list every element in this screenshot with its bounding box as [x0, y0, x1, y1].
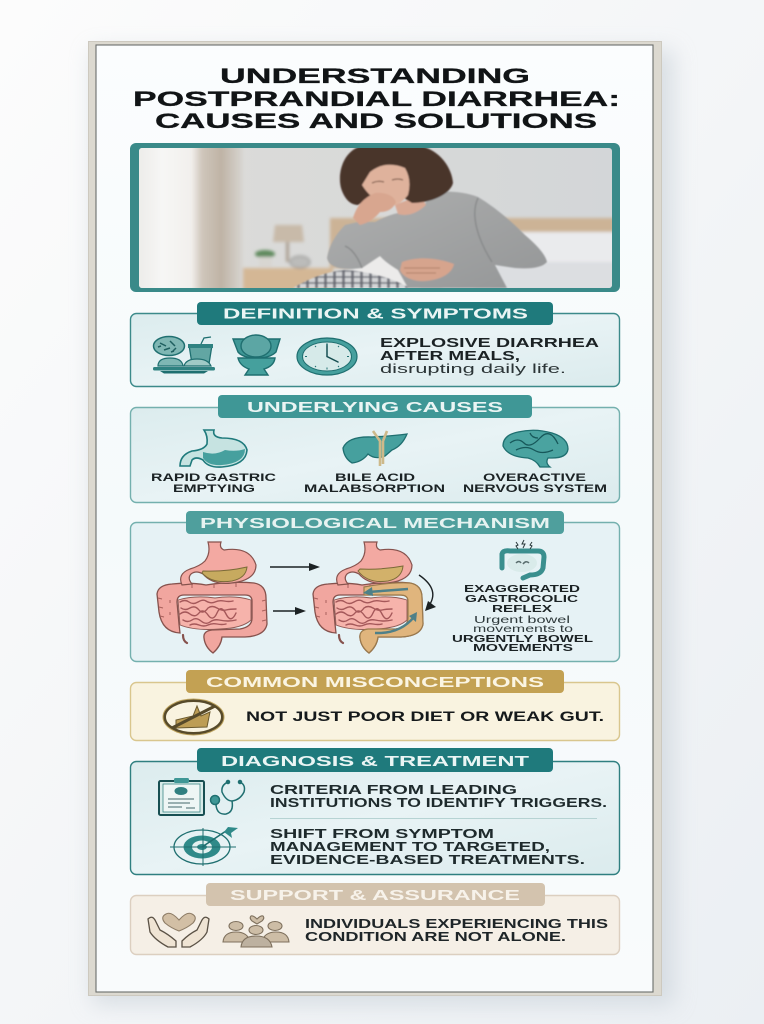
icon: group of people [223, 916, 289, 947]
icon: stomach [180, 430, 247, 467]
panel: common misconceptions [130, 670, 620, 740]
arrow: curved motion [419, 575, 436, 611]
text: gastrocolic reflex: MOVEMENTS [473, 642, 573, 654]
text: definition: EXPLOSIVE DIARRHEA [380, 335, 600, 350]
arrow: lower [273, 607, 306, 615]
heading: common misconceptions [186, 670, 564, 693]
text: gastrocolic reflex: GASTROCOLIC [465, 593, 579, 605]
diagram: digestive system with reflex [313, 542, 423, 653]
text: definition [380, 335, 600, 376]
heading: definition & symptoms: DEFINITION & SYMPTOMS [223, 306, 529, 322]
labels: causes: OVERACTIVE [483, 472, 586, 484]
heading: underlying causes [218, 395, 532, 418]
text: shift: EVIDENCE-BASED TREATMENTS. [270, 853, 585, 867]
heading: support & assurance: SUPPORT & ASSURANCE [230, 888, 521, 904]
icon: wall clock [297, 338, 357, 375]
labels: causes: NERVOUS SYSTEM [463, 483, 607, 495]
title: CAUSES AND SOLUTIONS [155, 110, 597, 133]
diagram: digestive system at rest [157, 542, 267, 653]
panel: underlying causes [130, 395, 620, 502]
heading: definition & symptoms [197, 302, 553, 325]
text: support message: INDIVIDUALS EXPERIENCING THIS [305, 917, 608, 931]
icon: no junk food [163, 699, 224, 735]
text: gastrocolic reflex: URGENTLY BOWEL [452, 633, 594, 645]
icon: stethoscope [210, 780, 244, 814]
heading: support & assurance [206, 883, 545, 906]
arrow: upper [270, 563, 320, 571]
text: shift: MANAGEMENT TO TARGETED, [270, 840, 550, 854]
labels: causes: BILE ACID [335, 472, 415, 484]
heading: underlying causes: UNDERLYING CAUSES [247, 400, 504, 416]
icon: hands holding heart [148, 913, 209, 947]
title: POSTPRANDIAL DIARRHEA: [133, 88, 620, 111]
heading: common misconceptions: COMMON MISCONCEPTIONS [206, 675, 545, 691]
heading: diagnosis & treatment [197, 748, 553, 772]
hero photo: woman holding her stomach on a bed [130, 143, 620, 292]
text: definition: disrupting daily life. [380, 361, 566, 376]
icon: target with arrow [170, 827, 238, 866]
text: gastrocolic reflex: REFLEX [492, 603, 552, 615]
labels: causes: EMPTYING [173, 483, 255, 495]
panel: diagnosis & treatment [130, 748, 620, 874]
text: criteria [270, 783, 607, 810]
title: UNDERSTANDING [220, 65, 530, 88]
text: gastrocolic reflex: Urgent bowel [474, 614, 570, 626]
text: gastrocolic reflex [452, 583, 594, 654]
title [133, 65, 620, 133]
labels: causes: RAPID GASTRIC [151, 472, 276, 484]
panel: physiological mechanism [130, 511, 620, 662]
labels: causes: MALABSORPTION [304, 483, 445, 495]
heading: diagnosis & treatment: DIAGNOSIS & TREATMENT [221, 754, 529, 770]
poster frame [88, 42, 662, 996]
text: support message: CONDITION ARE NOT ALONE. [305, 930, 566, 944]
text: shift: SHIFT FROM SYMPTOM [270, 827, 494, 841]
panel: support & assurance [130, 883, 620, 954]
frame shadow [92, 50, 674, 1005]
text: misconception: NOT JUST POOR DIET OR WEAK GUT. [246, 709, 604, 724]
heading: physiological mechanism: PHYSIOLOGICAL MECHANISM [200, 516, 550, 532]
text: support message [305, 917, 608, 944]
text: gastrocolic reflex: EXAGGERATED [464, 583, 581, 595]
icon: spasming colon [502, 540, 544, 578]
text: shift [270, 827, 585, 867]
icon: toilet [233, 335, 280, 375]
text: gastrocolic reflex: movements to [473, 623, 573, 635]
icon: meal tray [153, 336, 215, 374]
panel: definition & symptoms [130, 302, 620, 386]
heading: physiological mechanism [186, 511, 564, 534]
labels: causes [151, 472, 607, 495]
icon: clipboard [159, 778, 204, 815]
text: criteria: INSTITUTIONS TO IDENTIFY TRIGGERS. [270, 796, 607, 810]
text: definition: AFTER MEALS, [380, 348, 520, 363]
text: criteria: CRITERIA FROM LEADING [270, 783, 517, 797]
icon: liver [343, 431, 407, 466]
icon: brain [503, 430, 568, 467]
